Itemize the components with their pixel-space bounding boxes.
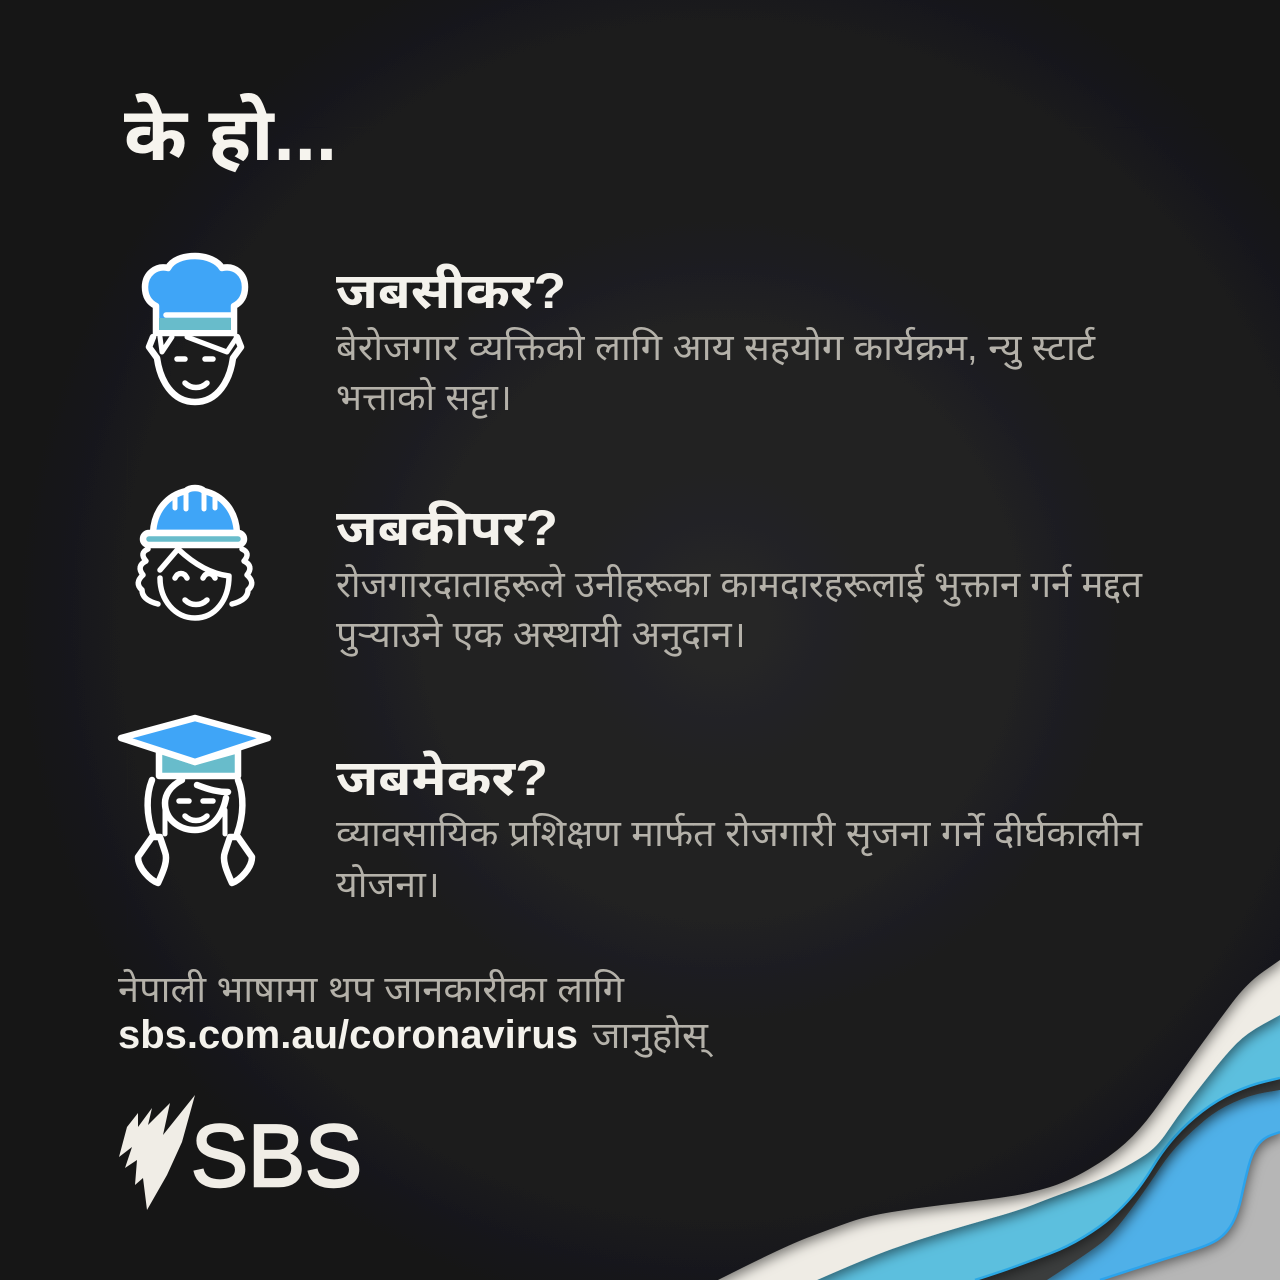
text: footer call to action (118, 969, 713, 1058)
logo: SBS (119, 1095, 362, 1210)
icon: graduate (121, 718, 268, 883)
text: jobkeeper description: पुर्‍याउने एक अस्थायी अनुदान। (336, 614, 746, 657)
text: footer call to action: sbs.com.au/coronavirus (118, 1013, 578, 1057)
text: jobmaker description: व्यावसायिक प्रशिक्षण मार्फत रोजगारी सृजना गर्ने दीर्घकालीन (336, 812, 1144, 856)
title: के हो... (124, 92, 337, 176)
text: jobseeker description: बेरोजगार व्यक्तिको लागि आय सहयोग कार्यक्रम, न्यु स्टार्ट (336, 326, 1096, 370)
heading: jobseeker: जबसीकर? (336, 263, 566, 319)
text: jobmaker description (336, 812, 1144, 905)
logo: SBS: SBS (191, 1106, 362, 1205)
icon: chef hat worker (145, 256, 245, 402)
icon: hard hat worker (138, 488, 252, 618)
text: jobkeeper description (336, 563, 1143, 657)
text: jobkeeper description: रोजगारदाताहरूले उनीहरूका कामदारहरूलाई भुक्तान गर्न मद्दत (336, 563, 1143, 607)
text: footer call to action: जानुहोस् (592, 1015, 713, 1058)
text: jobseeker description (336, 326, 1096, 419)
text: jobmaker description: योजना। (336, 864, 440, 905)
heading: jobkeeper: जबकीपर? (336, 500, 558, 556)
text: jobseeker description: भत्ताको सट्टा। (336, 377, 512, 419)
text: footer call to action: नेपाली भाषामा थप जानकारीका लागि (118, 969, 625, 1010)
heading: jobmaker: जबमेकर? (336, 750, 548, 806)
